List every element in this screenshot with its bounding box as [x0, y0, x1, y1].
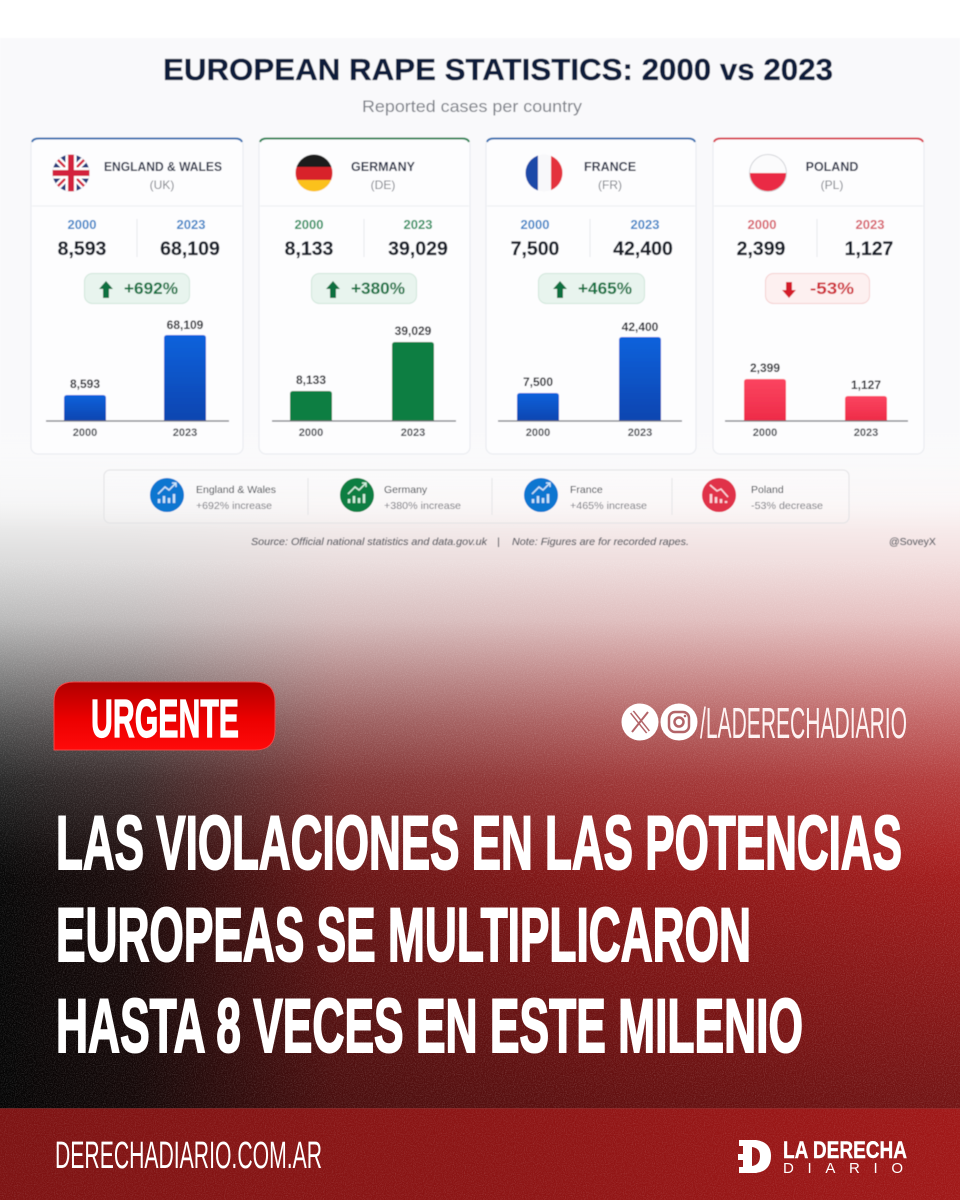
bar chart [725, 361, 908, 439]
bar chart: 2023 [854, 427, 878, 439]
2023 figures: 2023 [404, 217, 432, 232]
bar chart: 68,109 [167, 318, 204, 332]
country name: POLAND [806, 160, 858, 174]
badge: URGENTE: URGENTE [91, 689, 239, 749]
bar chart [498, 320, 682, 439]
panel: Poland: 1,127 [845, 238, 893, 260]
legend item: Poland [751, 484, 823, 512]
footer band [0, 1108, 960, 1200]
credit: @SoveyX [889, 536, 936, 548]
source note: | [497, 536, 500, 548]
logo: La Derecha Diario [738, 1137, 907, 1177]
source note [251, 536, 689, 548]
bar chart: 8,133 [296, 373, 326, 387]
bar chart: 7,500 [523, 375, 553, 389]
panel: Germany [259, 138, 470, 454]
bar chart: 1,127 [851, 378, 881, 392]
panel: France [486, 138, 696, 454]
icon: D mark [738, 1140, 771, 1173]
2023 figures: 2023 [177, 217, 205, 232]
change badge [312, 274, 416, 304]
2000 figures: 2000 [748, 217, 776, 232]
country name: FRANCE [584, 160, 636, 174]
source note: Source: Official national statistics and data.gov.uk [251, 536, 488, 548]
headline [56, 801, 902, 1069]
bar chart [272, 324, 456, 439]
2000 figures: 2000 [521, 217, 549, 232]
icon: French flag [525, 154, 564, 192]
change badge: +692% [124, 280, 178, 298]
panel: England and Wales: 8,593 [58, 238, 107, 260]
panel: France: (FR) [598, 178, 622, 192]
bar chart: 2000 [73, 427, 97, 439]
panel: Germany: (DE) [371, 178, 395, 192]
icon: England and Wales trend [150, 478, 184, 512]
bar chart: 2000 [526, 427, 550, 439]
background: red and black gradient [0, 430, 960, 1110]
legend item: Poland: Poland [751, 484, 784, 496]
legend item: Poland: -53% decrease [751, 500, 823, 512]
logo: La Derecha Diario: LA DERECHA [783, 1137, 907, 1164]
subtitle: Reported cases per country [362, 97, 583, 116]
badge: URGENTE [54, 682, 275, 750]
panel: Poland [713, 138, 924, 454]
icon: UK flag [52, 154, 90, 192]
legend item: France: +465% increase [570, 500, 647, 512]
website: DERECHADIARIO.COM.AR [55, 1135, 322, 1177]
icon: Polish flag [749, 154, 787, 192]
change badge: +465% [578, 280, 632, 298]
bar chart: 2023 [628, 427, 652, 439]
panel: England and Wales [31, 138, 243, 454]
logo: La Derecha Diario: DIARIO [783, 1160, 903, 1177]
legend item: Germany: Germany [384, 484, 428, 496]
bar chart: 39,029 [395, 324, 432, 338]
panel: Germany: 39,029 [388, 238, 448, 260]
panel: statistics infographic [0, 38, 960, 548]
legend item: England and Wales: England & Wales [196, 484, 276, 496]
2023 figures: 2023 [856, 217, 884, 232]
change badge [538, 274, 644, 304]
social handle [622, 699, 907, 748]
bar chart: 8,593 [70, 377, 100, 391]
panel: England and Wales: (UK) [150, 178, 174, 192]
change badge [84, 274, 190, 304]
2023 figures: 2023 [631, 217, 659, 232]
bar chart: 2023 [173, 427, 197, 439]
source note: Note: Figures are for recorded rapes. [512, 536, 689, 548]
country name: ENGLAND & WALES [104, 160, 222, 174]
legend item: France [570, 484, 647, 512]
panel: Germany: 8,133 [285, 238, 334, 260]
change badge: +380% [351, 280, 405, 298]
icon: Germany trend [340, 478, 374, 512]
legend item: France: France [570, 484, 603, 496]
change badge [766, 274, 870, 304]
title: EUROPEAN RAPE STATISTICS: 2000 vs 2023 [163, 52, 833, 87]
legend item: Germany [384, 484, 461, 512]
legend item: England and Wales: +692% increase [196, 500, 272, 512]
legend item: Germany: +380% increase [384, 500, 461, 512]
change badge: -53% [810, 280, 854, 298]
icon: Poland trend [702, 478, 736, 512]
2000 figures: 2000 [68, 217, 96, 232]
panel: France: 7,500 [511, 238, 560, 260]
bar chart: 2,399 [750, 361, 780, 375]
country name: GERMANY [351, 160, 416, 174]
bar chart: 2000 [299, 427, 323, 439]
2000 figures: 2000 [295, 217, 323, 232]
bar chart [46, 318, 229, 439]
legend item: England and Wales [196, 484, 276, 512]
icon: France trend [524, 478, 558, 512]
icon: X [622, 704, 658, 740]
panel: Poland: 2,399 [737, 238, 786, 260]
bar chart: 42,400 [622, 320, 659, 334]
icon: German flag [295, 154, 333, 193]
bar chart: 2000 [753, 427, 777, 439]
panel: England and Wales: 68,109 [160, 238, 220, 260]
panel: Poland: (PL) [821, 178, 843, 192]
icon: Instagram [660, 704, 698, 740]
panel: France: 42,400 [613, 238, 673, 260]
legend [104, 470, 849, 523]
bar chart: 2023 [401, 427, 425, 439]
